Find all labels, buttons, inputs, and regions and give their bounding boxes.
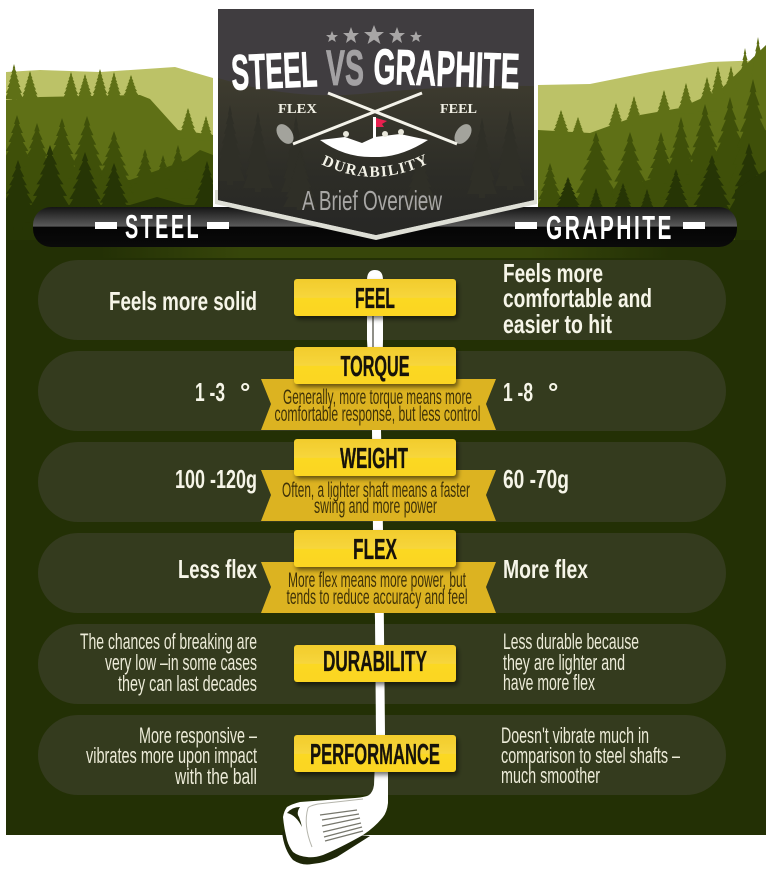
badge lower hill bbox=[218, 78, 534, 235]
performance steel text: with the ball bbox=[174, 764, 257, 789]
title text: STEEL bbox=[230, 41, 318, 101]
club head grooves bbox=[320, 810, 363, 841]
row: weight bbox=[175, 439, 569, 521]
row: feel bbox=[109, 258, 652, 339]
golf club shaft and head bbox=[282, 270, 388, 864]
club head outer shadow bbox=[282, 830, 370, 864]
row: torque bbox=[195, 347, 558, 430]
durability arc label: DURABILITY bbox=[321, 154, 426, 177]
panel: olive strip under header bbox=[100, 240, 670, 258]
torque tag bbox=[294, 347, 456, 384]
column header bar bbox=[33, 207, 737, 247]
flex steel text: Less flex bbox=[178, 554, 257, 584]
top tree row left bbox=[6, 64, 212, 135]
performance tag bbox=[294, 735, 456, 772]
feel steel text: Feels more solid bbox=[109, 286, 257, 316]
durability steel text: very low –in some cases bbox=[105, 650, 257, 675]
performance steel text bbox=[86, 723, 257, 789]
torque ribbon: comfortable response, but less control bbox=[274, 403, 480, 426]
row: flex bbox=[178, 530, 588, 613]
shaft and head bbox=[283, 270, 388, 857]
forest scene: right bbox=[533, 37, 768, 250]
middle tree row left bbox=[6, 116, 213, 205]
light hill right bbox=[538, 60, 750, 133]
middle tree row right bbox=[533, 79, 768, 250]
feel tag: FEEL bbox=[355, 283, 395, 315]
shaft shading bbox=[372, 316, 374, 348]
feel graphite text: comfortable and bbox=[503, 283, 652, 313]
golf green and flag bbox=[320, 117, 428, 157]
graphite label: GRAPHITE bbox=[546, 209, 674, 246]
performance graphite text: comparison to steel shafts – bbox=[501, 743, 680, 768]
club head inner line bbox=[306, 799, 363, 847]
crossed golf clubs bbox=[273, 93, 475, 147]
torque steel text: 1 -3 bbox=[195, 377, 225, 407]
feel tag bbox=[294, 279, 456, 316]
flex label: FLEX bbox=[278, 102, 317, 117]
performance graphite text: Doesn't vibrate much in bbox=[501, 723, 649, 748]
flex tag bbox=[294, 530, 456, 567]
durability tag: DURABILITY bbox=[323, 646, 427, 678]
row: performance bbox=[86, 723, 680, 789]
title text bbox=[230, 38, 521, 101]
flex ribbon bbox=[261, 562, 496, 613]
title text: GRAPHITE bbox=[373, 38, 521, 100]
flex tag: FLEX bbox=[353, 534, 397, 566]
mid hill right bbox=[538, 45, 766, 204]
stars bbox=[326, 25, 422, 44]
durability steel text bbox=[80, 629, 257, 696]
light hill left bbox=[6, 67, 213, 135]
steel label: STEEL bbox=[125, 208, 201, 245]
performance steel text: vibrates more upon impact bbox=[86, 743, 257, 768]
front tree row left bbox=[6, 145, 213, 240]
top tree row right bbox=[552, 37, 768, 137]
durability steel text: they can last decades bbox=[118, 671, 257, 696]
performance steel text: More responsive – bbox=[139, 723, 257, 748]
feel graphite text: Feels more bbox=[503, 258, 603, 288]
durability steel text: The chances of breaking are bbox=[80, 629, 257, 654]
performance graphite text: much smoother bbox=[501, 763, 600, 788]
graphite label bbox=[515, 209, 705, 246]
steel label bbox=[95, 208, 229, 245]
performance graphite text bbox=[501, 723, 680, 788]
weight ribbon: swing and more power bbox=[314, 495, 437, 518]
club head swoosh bbox=[287, 807, 302, 827]
forest scene: left bbox=[6, 64, 213, 240]
weight tag bbox=[294, 439, 456, 476]
weight steel text: 100 -120g bbox=[175, 464, 257, 494]
row: durability bbox=[80, 629, 639, 696]
subtitle: A Brief Overview bbox=[302, 185, 443, 216]
panel: dark green background bbox=[6, 240, 766, 835]
flex graphite text: More flex bbox=[503, 554, 588, 584]
badge faint tree silhouettes bbox=[228, 106, 511, 116]
mid hill left bbox=[6, 95, 213, 180]
torque graphite text: 1 -8 bbox=[503, 377, 533, 407]
torque graphite text: ° bbox=[548, 377, 558, 407]
title badge bbox=[215, 9, 537, 240]
row backgrounds bbox=[38, 260, 726, 795]
torque tag: TORQUE bbox=[340, 351, 410, 383]
weight ribbon bbox=[261, 470, 496, 521]
feel label: FEEL bbox=[440, 102, 477, 117]
weight tag: WEIGHT bbox=[340, 443, 408, 475]
weight graphite text: 60 -70g bbox=[503, 464, 569, 494]
durability tag bbox=[294, 645, 456, 682]
durability graphite text: Less durable because bbox=[503, 629, 639, 654]
front tree row right bbox=[556, 144, 766, 240]
feel graphite text bbox=[503, 258, 652, 339]
torque steel text: ° bbox=[240, 377, 250, 407]
torque ribbon: Generally, more torque means more bbox=[283, 386, 472, 409]
title text: VS bbox=[326, 40, 364, 96]
durability graphite text bbox=[503, 629, 639, 695]
flex ribbon: tends to reduce accuracy and feel bbox=[286, 586, 468, 609]
torque ribbon bbox=[261, 379, 496, 430]
durability graphite text: they are lighter and bbox=[503, 650, 625, 675]
feel graphite text: easier to hit bbox=[503, 309, 612, 339]
performance tag: PERFORMANCE bbox=[310, 739, 440, 771]
weight ribbon: Often, a lighter shaft means a faster bbox=[282, 479, 470, 502]
flex ribbon: More flex means more power, but bbox=[288, 569, 466, 592]
durability graphite text: have more flex bbox=[503, 670, 595, 695]
